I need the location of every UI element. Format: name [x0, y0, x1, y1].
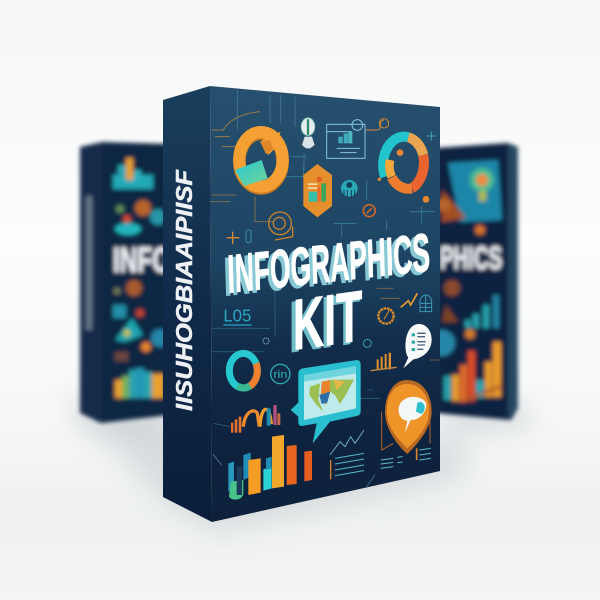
- icon: orange shield chart: [303, 164, 332, 217]
- blurred title: INFO: [113, 241, 171, 280]
- box front: [210, 86, 440, 522]
- icon: trend line: [401, 293, 417, 307]
- spine text: [86, 196, 92, 330]
- circuit lines: [210, 90, 436, 244]
- icon: dashboard outline: [327, 120, 365, 158]
- blurred icons: [113, 158, 169, 398]
- title: kit: KIT: [293, 276, 362, 366]
- icon: small orange badge: [363, 205, 375, 217]
- bars: main bar chart: [228, 435, 312, 500]
- icon: orange location pin: [382, 380, 432, 454]
- left background box: [80, 142, 171, 423]
- lower icons: [212, 288, 440, 500]
- text rows: [381, 448, 431, 468]
- icon: teal fingerprint: [341, 180, 358, 198]
- small orange dots: [378, 149, 429, 203]
- spine text: IISUHOGBIAAIPIISF: [171, 169, 197, 411]
- icon: circle label: rin: [273, 369, 287, 381]
- icon: light bulb rocket: [301, 118, 315, 148]
- floor shadows: [70, 400, 535, 530]
- lines: [212, 288, 440, 427]
- main box: [163, 86, 440, 522]
- label: LOS: L05: [223, 306, 251, 326]
- title: [223, 223, 431, 368]
- icon: orange gauge: [378, 308, 394, 324]
- icon: donut chart: [383, 137, 424, 189]
- icon: orange ring chart: [235, 132, 283, 188]
- right background box: [429, 143, 518, 420]
- icon: map speech bubble: [291, 360, 361, 443]
- box spine: [163, 86, 212, 522]
- blurred icons: [429, 160, 502, 402]
- title: kit extrusion: KIT: [289, 278, 360, 368]
- icon: donut chart: [229, 353, 257, 388]
- upper icons and circuit lines: [210, 90, 436, 244]
- icon: table globe: [420, 295, 432, 312]
- bars: arches chart: [231, 405, 280, 433]
- icon: small gear: [363, 339, 371, 347]
- icon: circle label: [271, 364, 290, 384]
- icon: orange gear: [269, 212, 293, 240]
- blurred title: PHICS: [440, 240, 502, 276]
- bars: small orange chart: [377, 353, 391, 369]
- icon: line chart with text rows: [330, 430, 364, 479]
- icon: speech bubble list: [403, 324, 432, 368]
